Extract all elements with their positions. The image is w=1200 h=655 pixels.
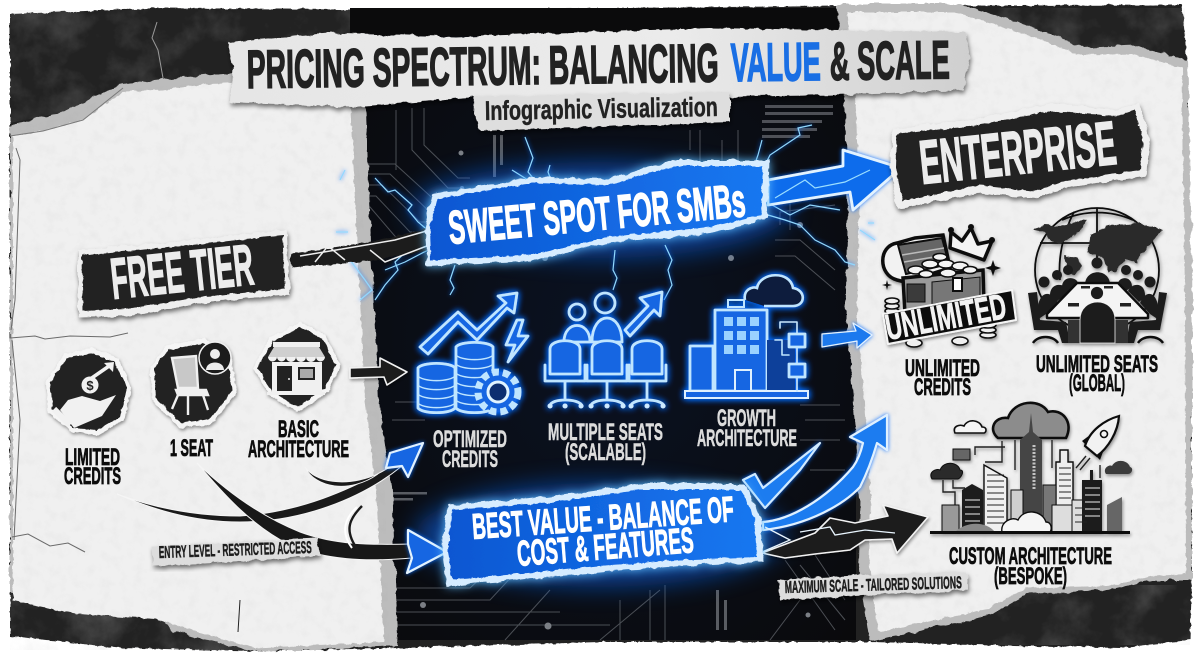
labels: enterprise features: (BESPOKE) [994, 563, 1067, 590]
label: free tier: FREE TIER [108, 232, 257, 312]
arrow: best value to enterprise up [763, 415, 887, 530]
globe [1035, 208, 1159, 332]
icon: custom architecture city [930, 403, 1132, 534]
banner: best value: BEST VALUE - BALANCE OF [471, 488, 735, 547]
glow behind banners [410, 162, 790, 587]
circuit dots and data marks [389, 105, 833, 630]
labels: mid tier features: OPTIMIZED [433, 426, 507, 453]
lightning bolts [336, 125, 875, 300]
banner: sweet spot for SMBs: SWEET SPOT FOR SMBs [446, 173, 748, 254]
arrow: basic tier to mid tier [350, 358, 407, 385]
icon: multiple seats [545, 292, 666, 406]
front person [1080, 286, 1115, 343]
continents [1032, 219, 1163, 276]
labels: mid tier features: GROWTH [717, 405, 776, 432]
banner: sweet spot for SMBs [424, 160, 769, 266]
title strip: & SCALE [829, 30, 950, 92]
arrow: sweet spot to enterprise [768, 150, 901, 210]
small clouds [954, 421, 986, 433]
arrow: free tier to sweet spot [290, 228, 432, 268]
labels: mid tier features [433, 405, 797, 473]
arrow: one seat to best value [197, 463, 447, 573]
note: maximum scale: MAXIMUM SCALE - TAILORED SOLUTIONS [785, 573, 962, 597]
table [1047, 283, 1148, 318]
icon: one seat [150, 338, 237, 428]
labels: enterprise features: (GLOBAL) [1069, 370, 1125, 397]
panel: left torn paper [10, 70, 398, 652]
ground cloud [1002, 512, 1051, 532]
rocket [1085, 416, 1119, 456]
subtitle strip [474, 92, 730, 131]
panel: right torn paper [837, 4, 1192, 643]
label: enterprise [890, 104, 1150, 209]
crown [950, 228, 992, 260]
icon: limited credits: $ [86, 378, 94, 393]
icon: unlimited seats global meeting [1028, 208, 1167, 343]
arrow: growth to unlimited [822, 323, 872, 348]
person badge [199, 342, 231, 374]
icon: unlimited credits treasure chest: UNLIMITED [882, 285, 1009, 348]
banner: best value: COST & FEATURES [515, 519, 695, 574]
labels: mid tier features: (SCALABLE) [565, 439, 646, 466]
labels: free tier features: ARCHITECTURE [248, 436, 349, 463]
check mark [743, 443, 820, 508]
circuit traces [360, 108, 845, 640]
labels: free tier features: LIMITED [65, 444, 120, 471]
seated people around the table [1028, 258, 1167, 343]
labels: enterprise features: CREDITS [914, 374, 971, 401]
labels: mid tier features: ARCHITECTURE [697, 425, 797, 452]
panel: central circuit board [350, 8, 856, 640]
paper cracks [10, 88, 240, 632]
coin stacks [885, 298, 996, 347]
icon: limited credits [46, 348, 131, 435]
labels: mid tier features: CREDITS [442, 446, 498, 473]
icon: basic architecture shop [253, 322, 340, 412]
title strip: PRICING SPECTRUM: BALANCING [246, 33, 719, 100]
labels: free tier features: CREDITS [64, 463, 121, 490]
banner: best value [442, 484, 763, 586]
coin heap [908, 254, 977, 278]
windows [965, 445, 1100, 523]
labels: mid tier features: MULTIPLE SEATS [548, 419, 663, 446]
label: free tier [78, 230, 290, 318]
labels: free tier features [64, 416, 349, 490]
labels: free tier features: BASIC [278, 416, 319, 443]
labels: enterprise features: UNLIMITED [905, 355, 980, 382]
icon: unlimited credits treasure chest [882, 224, 1016, 348]
unlimited ribbon [883, 290, 1016, 344]
icon: optimized credits [418, 293, 528, 413]
chest lid [883, 235, 950, 282]
arrow: best value to custom architecture [762, 505, 928, 558]
note: entry level [152, 538, 320, 566]
chest body [903, 270, 984, 314]
note: maximum scale [778, 572, 968, 600]
wires and data boxes [943, 440, 1100, 515]
skyline [942, 413, 1122, 532]
icon: growth architecture [685, 275, 808, 398]
labels: enterprise features [905, 351, 1158, 590]
subtitle strip: Infographic Visualization [485, 92, 718, 126]
labels: free tier features: 1 SEAT [170, 435, 213, 462]
note: entry level: ENTRY LEVEL - RESTRICTED ACCESS [159, 538, 312, 562]
arrow: limited credits to optimized credits [117, 443, 423, 522]
title strip: VALUE [730, 32, 821, 93]
main cloud [993, 403, 1069, 438]
